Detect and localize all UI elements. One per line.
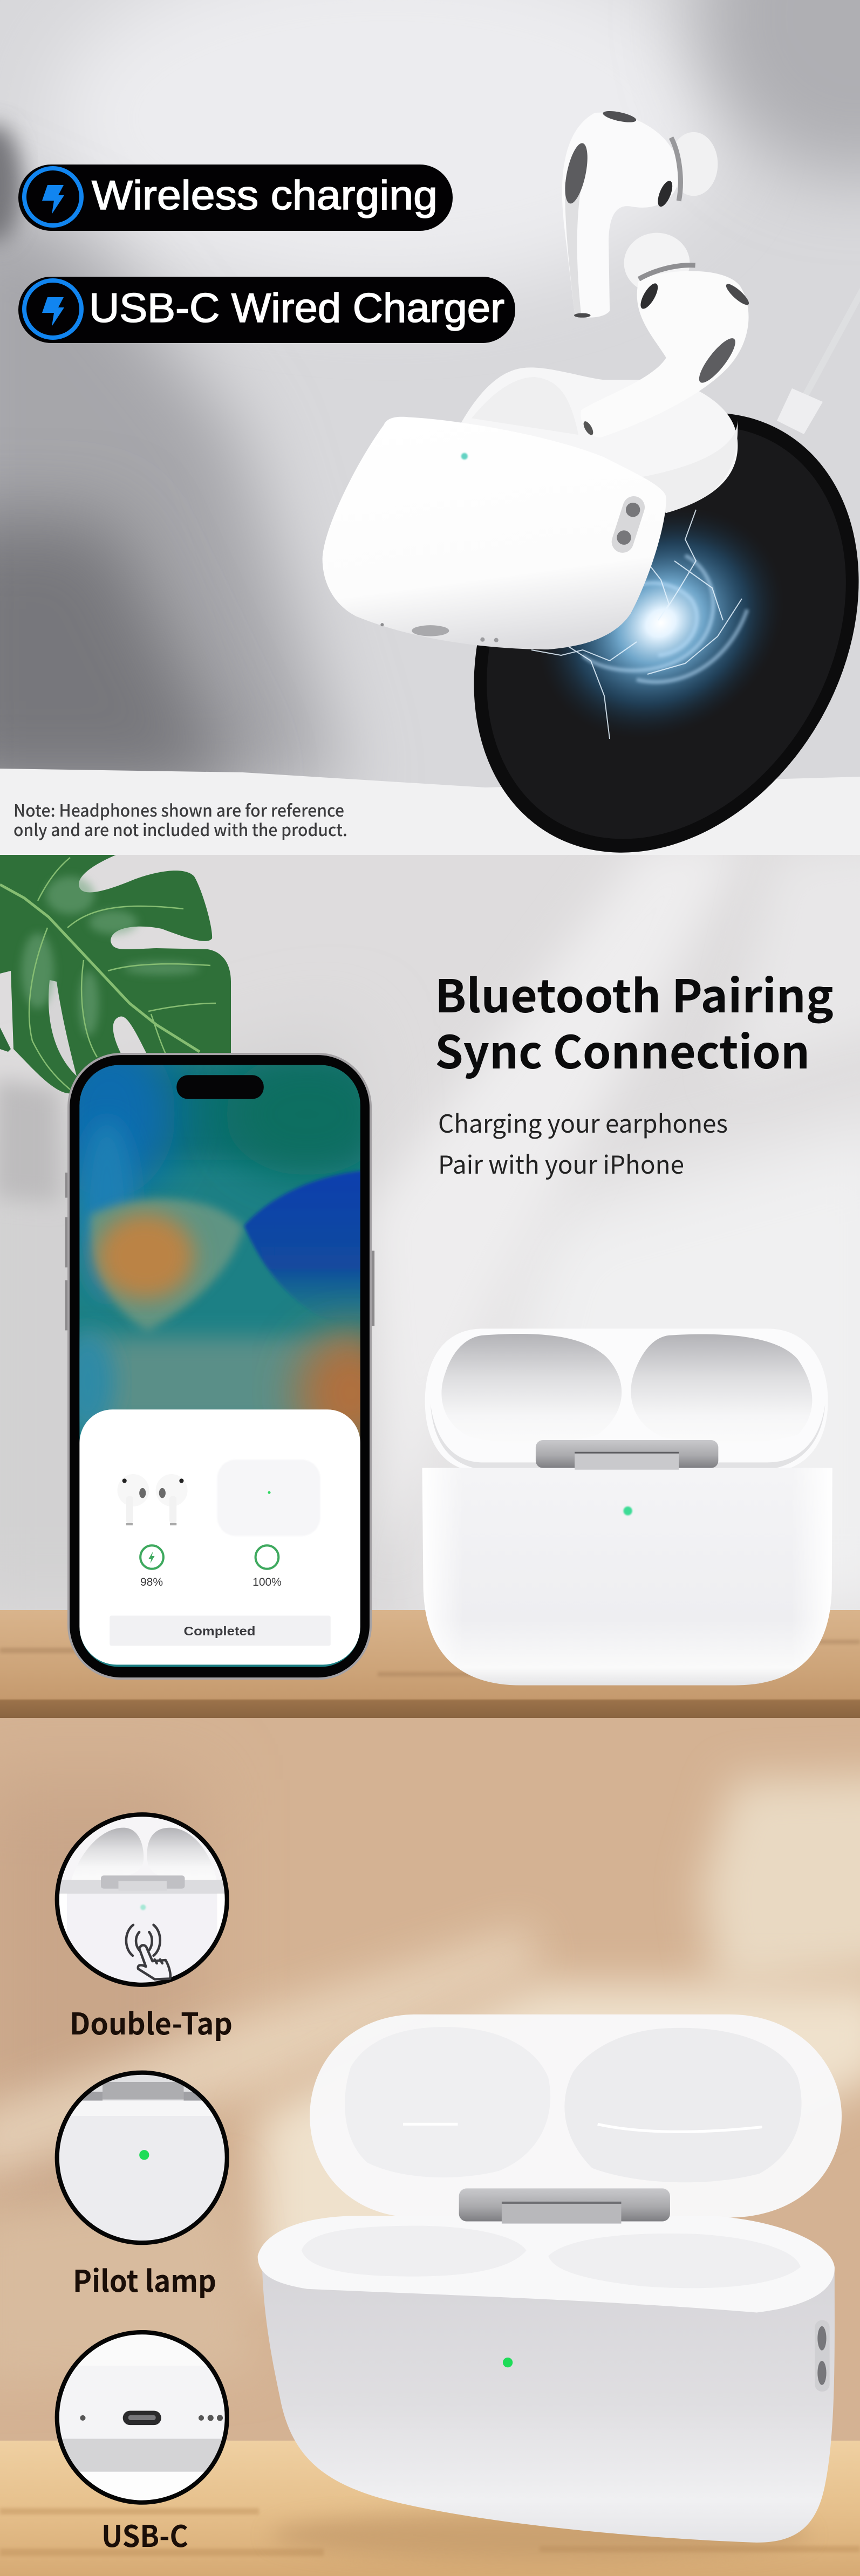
table top <box>0 2441 860 2576</box>
pill label: wireless charging <box>18 165 453 231</box>
phone texts: 100% <box>252 1576 282 1588</box>
battery rings <box>140 1545 163 1569</box>
body <box>262 2264 835 2543</box>
heading <box>435 961 834 1082</box>
icon: small earbuds <box>117 1474 188 1525</box>
labels: Pilot lamp <box>73 2257 216 2300</box>
callout: pilot lamp <box>55 2072 230 2248</box>
phone texts: 98% <box>140 1576 163 1588</box>
labels <box>70 2000 233 2556</box>
background: wall with light streaks <box>0 841 860 1718</box>
callout: double-tap <box>55 1814 230 1990</box>
icon: tap hand <box>126 1925 170 1979</box>
USB cable <box>777 388 823 434</box>
charging pad disc <box>474 413 859 853</box>
panel: wireless charging <box>0 0 860 922</box>
icon: blue bolt <box>24 280 81 338</box>
subtext: Charging your earphones <box>438 1105 728 1140</box>
callout: USB-C port <box>55 2330 230 2506</box>
lid behind case <box>461 367 738 513</box>
lower earbud <box>581 233 752 437</box>
pairing card <box>79 1409 360 1664</box>
pill label: USB-C wired charger: USB-C Wired Charger <box>89 285 504 331</box>
scaled drawings <box>44 1031 832 1686</box>
heading: Bluetooth Pairing <box>435 961 834 1026</box>
panel: bluetooth pairing <box>0 841 860 1718</box>
phone texts <box>140 1576 282 1638</box>
charging case <box>323 417 738 649</box>
background: grey studio wall <box>0 0 860 855</box>
lid <box>310 2015 842 2217</box>
earbuds and open lid <box>323 109 752 649</box>
panel: case features <box>0 1718 860 2576</box>
earbud case, open <box>422 1328 832 1686</box>
subtext <box>438 1105 728 1181</box>
pill label: wireless charging: Wireless charging <box>92 173 438 218</box>
hinge <box>459 2188 670 2224</box>
hinge <box>536 1440 718 1470</box>
labels: USB-C <box>101 2512 188 2556</box>
heading: Sync Connection <box>435 1017 810 1082</box>
phone texts: Completed <box>183 1624 256 1638</box>
phone <box>44 1031 406 1680</box>
note text: Note: Headphones shown are for reference <box>13 797 344 821</box>
labels: Double-Tap <box>70 2000 233 2043</box>
icon: monstera leaf <box>0 855 231 1093</box>
lightning glow <box>493 461 829 785</box>
table top <box>0 1610 860 1718</box>
phone wallpaper <box>44 1031 406 1667</box>
side vent <box>815 2320 830 2392</box>
background: warm wall <box>0 1718 860 2576</box>
upper earbud <box>561 109 718 318</box>
icon: blue bolt <box>24 168 81 225</box>
pill label: USB-C wired charger <box>18 277 515 343</box>
subtext: Pair with your iPhone <box>438 1146 684 1181</box>
earbud case, open <box>258 2015 842 2543</box>
note text: only and are not included with the product. <box>13 817 347 841</box>
